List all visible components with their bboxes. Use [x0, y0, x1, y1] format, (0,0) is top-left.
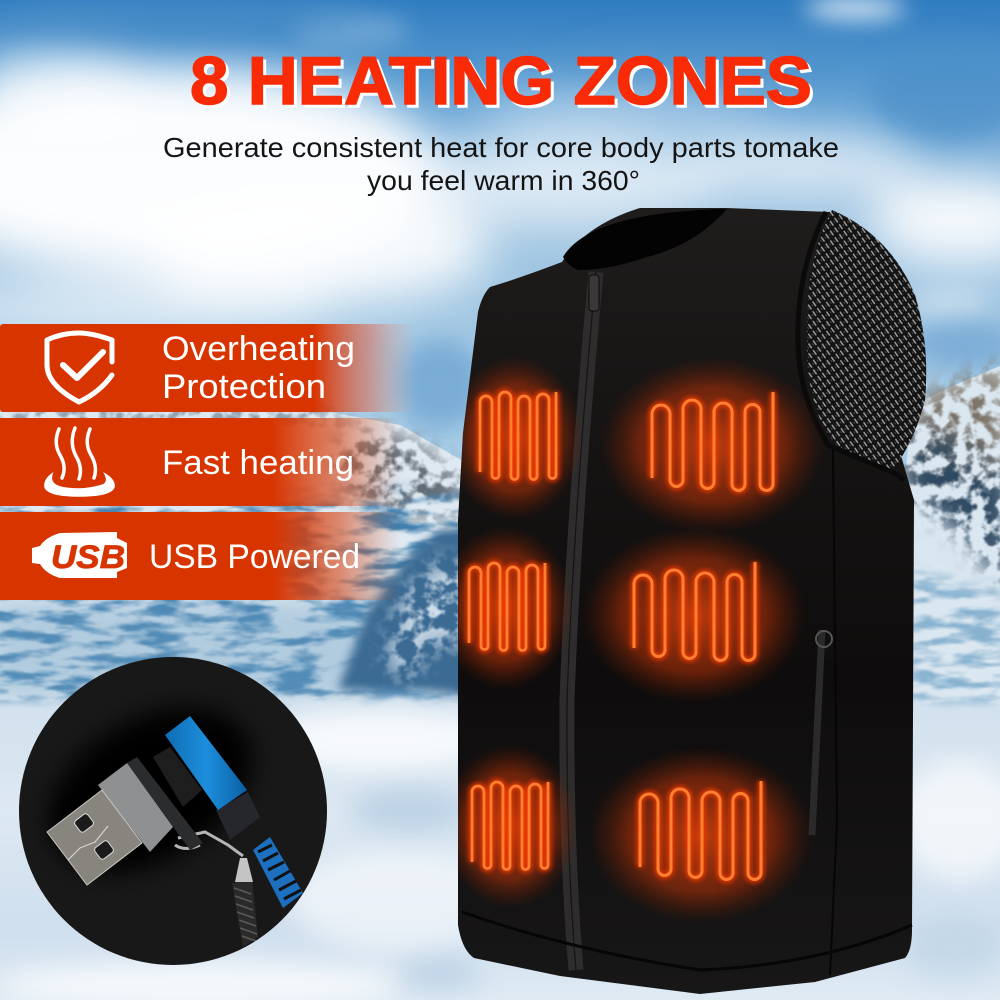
vest body — [458, 208, 914, 994]
heating coil: middle left — [469, 563, 545, 650]
label: fast heating: Fast heating — [162, 444, 354, 482]
background: clouds — [0, 0, 1000, 430]
icon: shield with check — [47, 333, 112, 402]
heating coil: middle right — [634, 562, 755, 660]
vest hem — [462, 912, 912, 970]
silver ferrule — [235, 858, 253, 882]
label: overheating protection — [162, 330, 355, 406]
label: overheating protection: Protection — [162, 368, 326, 406]
label: usb powered: USB Powered — [149, 538, 360, 576]
heating coil: upper left — [480, 392, 556, 480]
rock specks: horizon — [0, 408, 345, 424]
feature bar: usb powered — [0, 512, 400, 600]
title: 8 HEATING ZONES — [190, 43, 812, 119]
heating coil: upper right — [652, 392, 773, 490]
title: 8 HEATING ZONES — [193, 46, 815, 122]
blue cylinder — [165, 716, 247, 810]
grey collar — [98, 763, 173, 852]
right snow field — [905, 366, 1000, 740]
vest zipper — [567, 272, 599, 970]
vest side pocket — [812, 630, 832, 835]
vest — [437, 208, 926, 994]
vest inner collar — [563, 209, 727, 270]
icon: heat waves — [45, 428, 114, 496]
background: fog — [0, 702, 1000, 1000]
connector shadow — [45, 704, 255, 876]
rock specks: ridge — [335, 430, 460, 515]
heating glow — [437, 356, 824, 923]
icon: usb plug: USB — [51, 539, 125, 575]
inset: usb connector close-up — [19, 657, 327, 965]
vest side seam — [830, 450, 837, 975]
right rock mass lower — [905, 430, 1000, 590]
black braided cable — [232, 880, 258, 947]
blue braided cable — [253, 837, 303, 908]
left snow field — [0, 408, 470, 720]
feature bar: fast heating — [0, 418, 400, 506]
dark rock outcrop — [338, 530, 470, 695]
heating coil: lower left — [472, 782, 548, 870]
right lower haze — [905, 570, 1000, 735]
inset background — [19, 657, 327, 965]
silver usb plug — [47, 790, 142, 885]
feature bar: overheating protection — [0, 324, 413, 412]
background: snowy mountains — [0, 362, 1000, 740]
background: sky — [0, 0, 1000, 720]
subtitle: Generate consistent heat for core body parts tomake — [163, 132, 839, 163]
haze on lower slope — [0, 600, 480, 700]
blue streaks: lower slope — [0, 495, 480, 705]
right rock mass top — [914, 362, 1000, 480]
subtitle — [163, 132, 839, 196]
subtitle: you feel warm in 360° — [367, 165, 640, 196]
clasp — [175, 832, 243, 856]
heating coil: lower right — [640, 781, 761, 880]
highlights on dark rock — [385, 560, 470, 680]
vest mesh armhole — [807, 210, 926, 470]
icon: usb plug — [32, 532, 127, 578]
label: overheating protection: Overheating — [162, 330, 355, 368]
strain relief — [216, 792, 260, 840]
black plate — [127, 757, 203, 850]
vest armhole seam — [798, 212, 904, 480]
dark connector body — [153, 747, 202, 807]
